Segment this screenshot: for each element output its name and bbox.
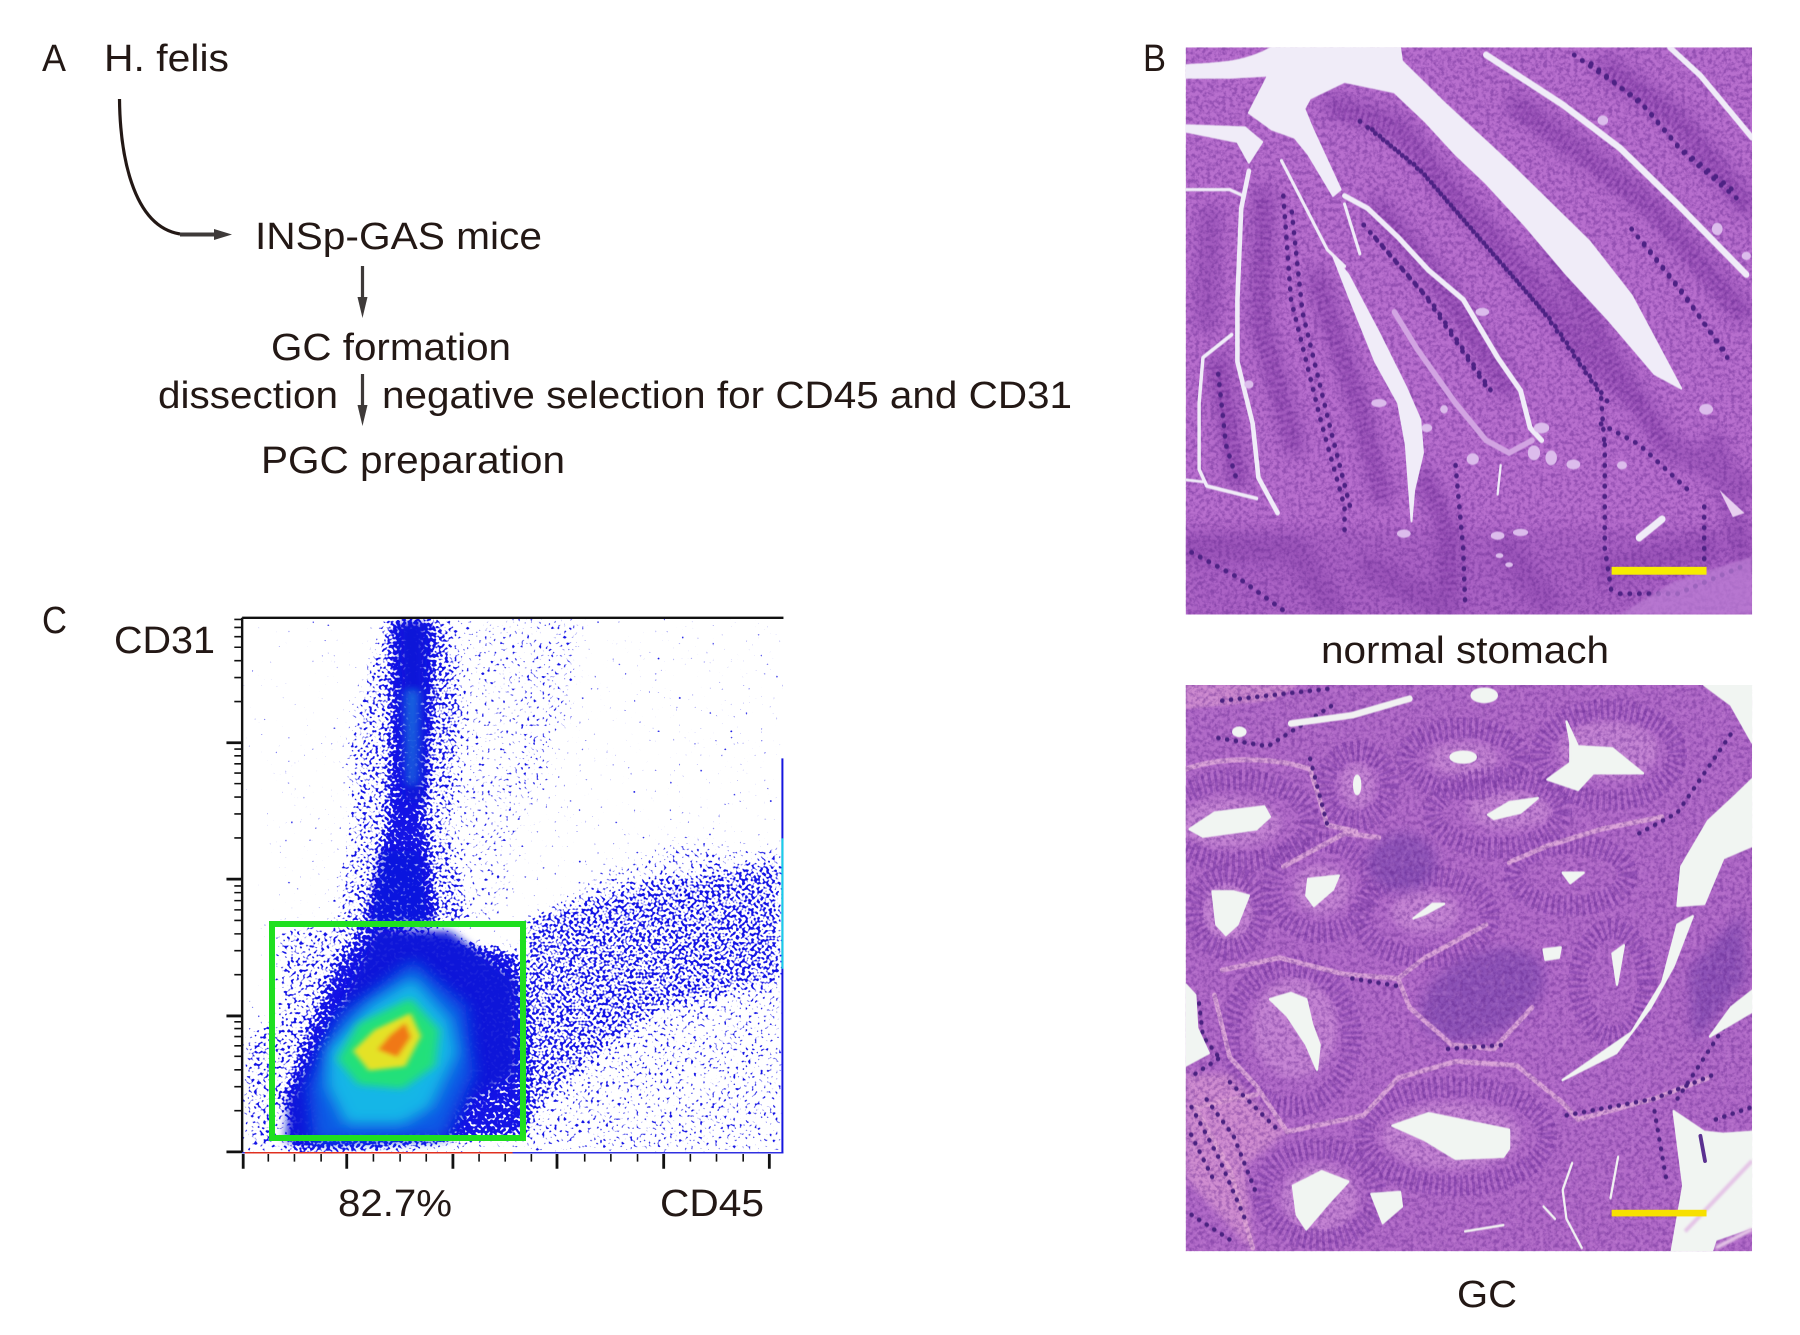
arrow: mice to GC formation (358, 266, 368, 318)
x axis label CD45: CD45 (660, 1183, 764, 1225)
text: H. felis: H. felis (104, 38, 229, 80)
arrow: H. felis to mice (120, 99, 232, 240)
panel C: flow cytometry plot (42, 600, 783, 1225)
panel A: experimental workflow (42, 38, 1072, 482)
panel label A: A (42, 38, 67, 80)
panel label C: C (42, 600, 67, 642)
text: negative selection: negative selection for CD45 and CD31 (382, 375, 1072, 417)
text: PGC preparation: PGC preparation (261, 440, 565, 482)
panel B: histology images (1143, 38, 1752, 1316)
text: GC formation: GC formation (271, 327, 511, 369)
plot frame and axis ticks (226, 618, 783, 1169)
text: dissection: dissection (158, 375, 338, 417)
scale bar (1612, 567, 1707, 575)
green gate box (272, 924, 523, 1138)
micrograph: normal stomach (1186, 47, 1752, 614)
arrow: GC formation to PGC preparation (358, 374, 368, 426)
caption: GC: GC (1457, 1274, 1517, 1316)
caption: normal stomach: normal stomach (1321, 630, 1609, 672)
panel label B: B (1143, 38, 1166, 80)
scale bar (1612, 1210, 1707, 1216)
gate percentage 82.7%: 82.7% (338, 1183, 452, 1225)
scatter dots (243, 618, 783, 1153)
micrograph: gastric cancer (1186, 685, 1752, 1252)
density core of the scatter (285, 624, 515, 1141)
y axis label CD31: CD31 (114, 620, 215, 662)
text: INSp-GAS mice: INSp-GAS mice (255, 216, 542, 258)
